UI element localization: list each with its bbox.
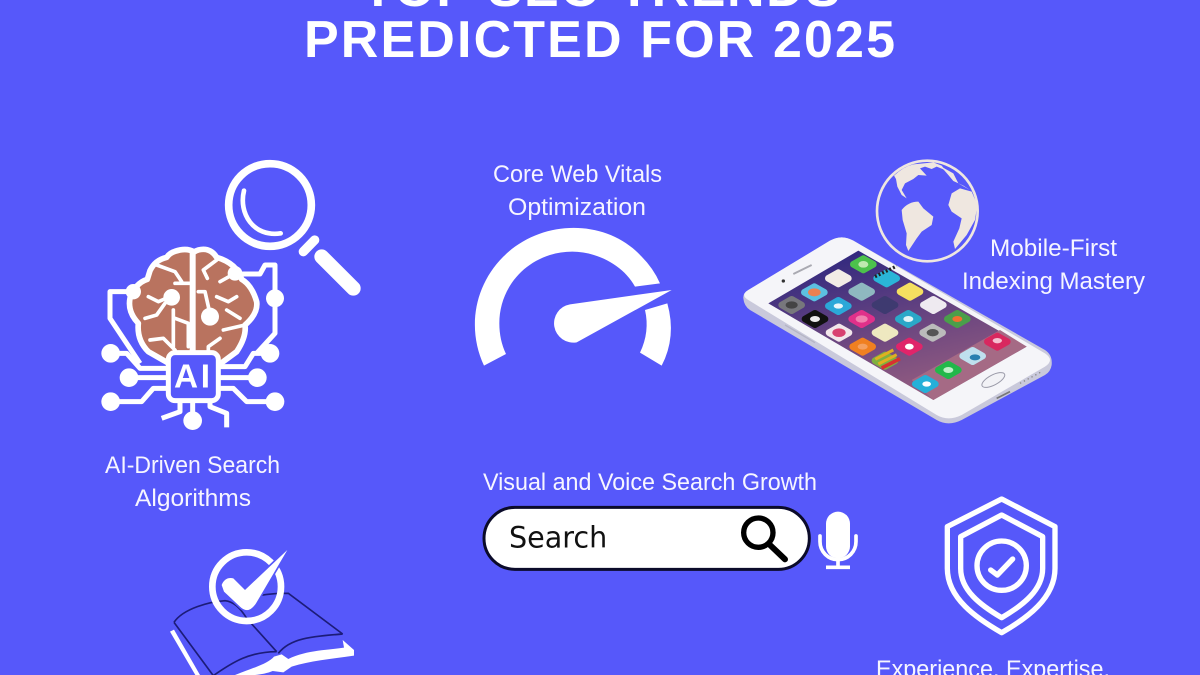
icon: circuit traces	[110, 265, 275, 427]
icon: microphone	[820, 512, 856, 567]
app icons	[782, 259, 1007, 390]
icon: security shield	[947, 499, 1055, 633]
icon: speedometer gauge	[475, 228, 672, 366]
label: AI-driven search	[105, 452, 280, 512]
search bar: Search	[509, 520, 607, 554]
icon: AI chip: AI	[174, 358, 213, 395]
label: AI-driven search: Algorithms	[135, 485, 251, 512]
label: core web vitals: Optimization	[508, 194, 646, 221]
label: mobile-first indexing: Mobile-First	[990, 235, 1117, 262]
icon: AI brain with magnifying glass	[101, 164, 353, 430]
icon: brain	[126, 249, 257, 364]
label: AI-driven search: AI-Driven Search	[105, 452, 280, 479]
label: visual and voice search: Visual and Voice Search Growth	[483, 469, 817, 496]
label: core web vitals: Core Web Vitals	[493, 161, 662, 188]
icon: globe	[877, 161, 978, 261]
label: mobile-first indexing	[962, 235, 1145, 295]
phone body	[743, 237, 1052, 423]
check badge	[212, 550, 287, 621]
icon: AI chip	[168, 353, 218, 401]
icon: circuit nodes	[101, 289, 284, 430]
phone details	[782, 265, 1042, 398]
book outline	[174, 593, 343, 675]
icon: open book with check mark	[170, 550, 354, 675]
icon: smartphone	[743, 237, 1052, 423]
book page edges	[170, 630, 354, 675]
label: mobile-first indexing: Indexing Mastery	[962, 268, 1145, 295]
title: PREDICTED FOR 2025	[304, 11, 895, 69]
icon: magnifying glass	[229, 164, 353, 288]
search bar	[484, 507, 809, 569]
phone face	[744, 237, 1050, 418]
label: core web vitals	[493, 161, 662, 221]
